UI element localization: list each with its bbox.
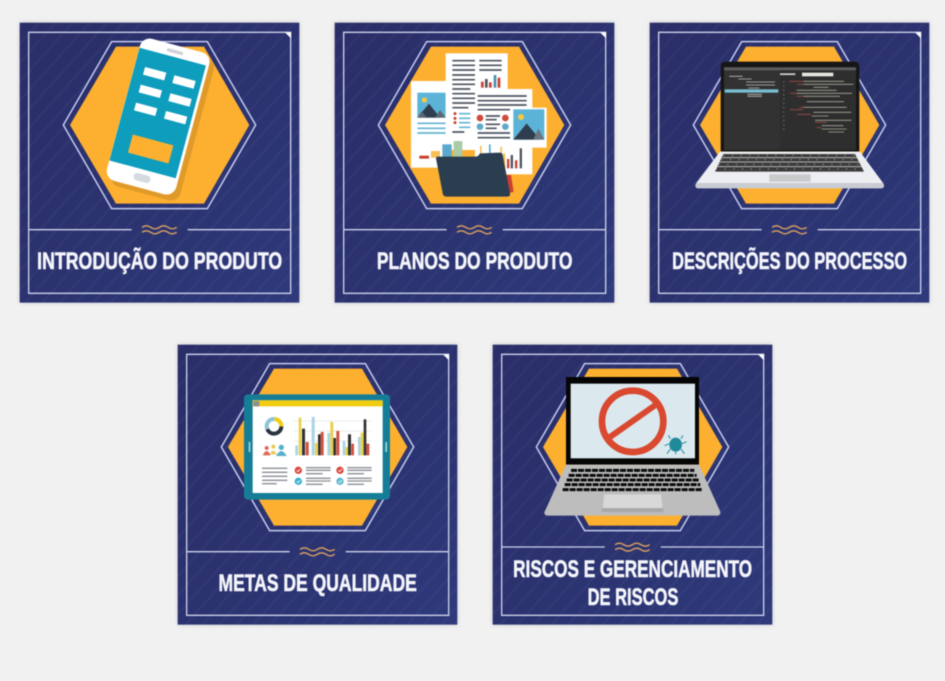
- heading second line: DE RISCOS: [588, 584, 678, 611]
- wave ornament: [457, 226, 492, 234]
- hexagon: [221, 364, 414, 531]
- hexagon: [536, 364, 729, 531]
- people icons: [263, 445, 287, 456]
- icon: tablet dashboard: [244, 394, 390, 500]
- frame corner: [915, 32, 921, 38]
- frame: [29, 32, 291, 293]
- frame corner: [758, 354, 764, 360]
- text lines and checks: [262, 467, 372, 485]
- bug: [665, 435, 687, 454]
- frame corner: [285, 32, 291, 38]
- panel: descrições do processo: [650, 23, 929, 303]
- panel: introdução do produto: [20, 23, 299, 303]
- donut chart: [267, 419, 281, 434]
- frame corner: [600, 32, 606, 38]
- hexagon: [63, 42, 256, 209]
- icon: documents and folder: [411, 53, 547, 197]
- icon: laptop with code editor: [695, 62, 884, 188]
- panel: metas de qualidade: [178, 345, 457, 625]
- heading: RISCOS E GERENCIAMENTO: [513, 556, 752, 583]
- heading: METAS DE QUALIDADE: [218, 570, 417, 597]
- frame: [659, 32, 921, 293]
- frame corner: [443, 354, 449, 360]
- hexagon: [378, 42, 571, 209]
- icon: smartphone: [104, 36, 216, 203]
- wave ornament: [300, 548, 335, 556]
- frame: [344, 32, 606, 293]
- icon: laptop with bug warning: [544, 377, 720, 516]
- wave ornament: [615, 543, 650, 551]
- frame: [187, 354, 449, 615]
- wave ornament: [772, 226, 807, 234]
- hexagon: [693, 42, 886, 209]
- panel: planos do produto: [335, 23, 614, 303]
- heading: PLANOS DO PRODUTO: [377, 248, 572, 275]
- wave ornament: [142, 226, 177, 234]
- panel: riscos e gerenciamento de riscos: [493, 345, 772, 625]
- frame: [502, 354, 764, 615]
- bar chart: [294, 417, 371, 455]
- heading: INTRODUÇÃO DO PRODUTO: [37, 247, 282, 275]
